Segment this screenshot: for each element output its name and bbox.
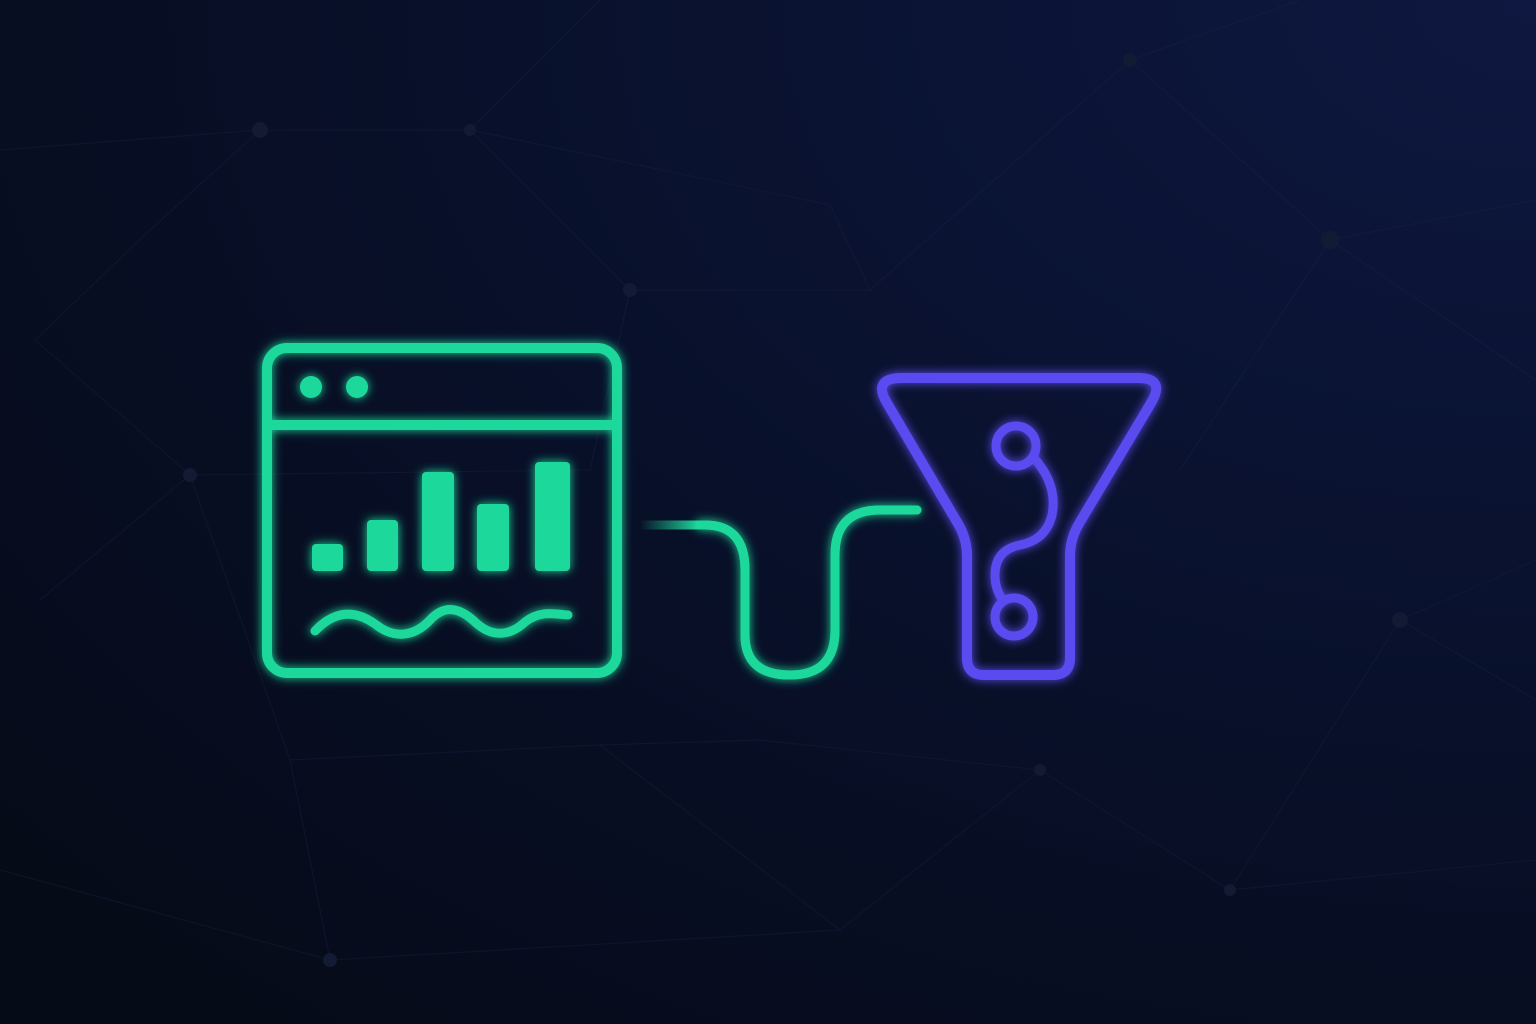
cable connector (640, 510, 917, 675)
icon: funnel with git nodes (882, 378, 1156, 675)
icon: browser window with bar chart (267, 348, 617, 673)
